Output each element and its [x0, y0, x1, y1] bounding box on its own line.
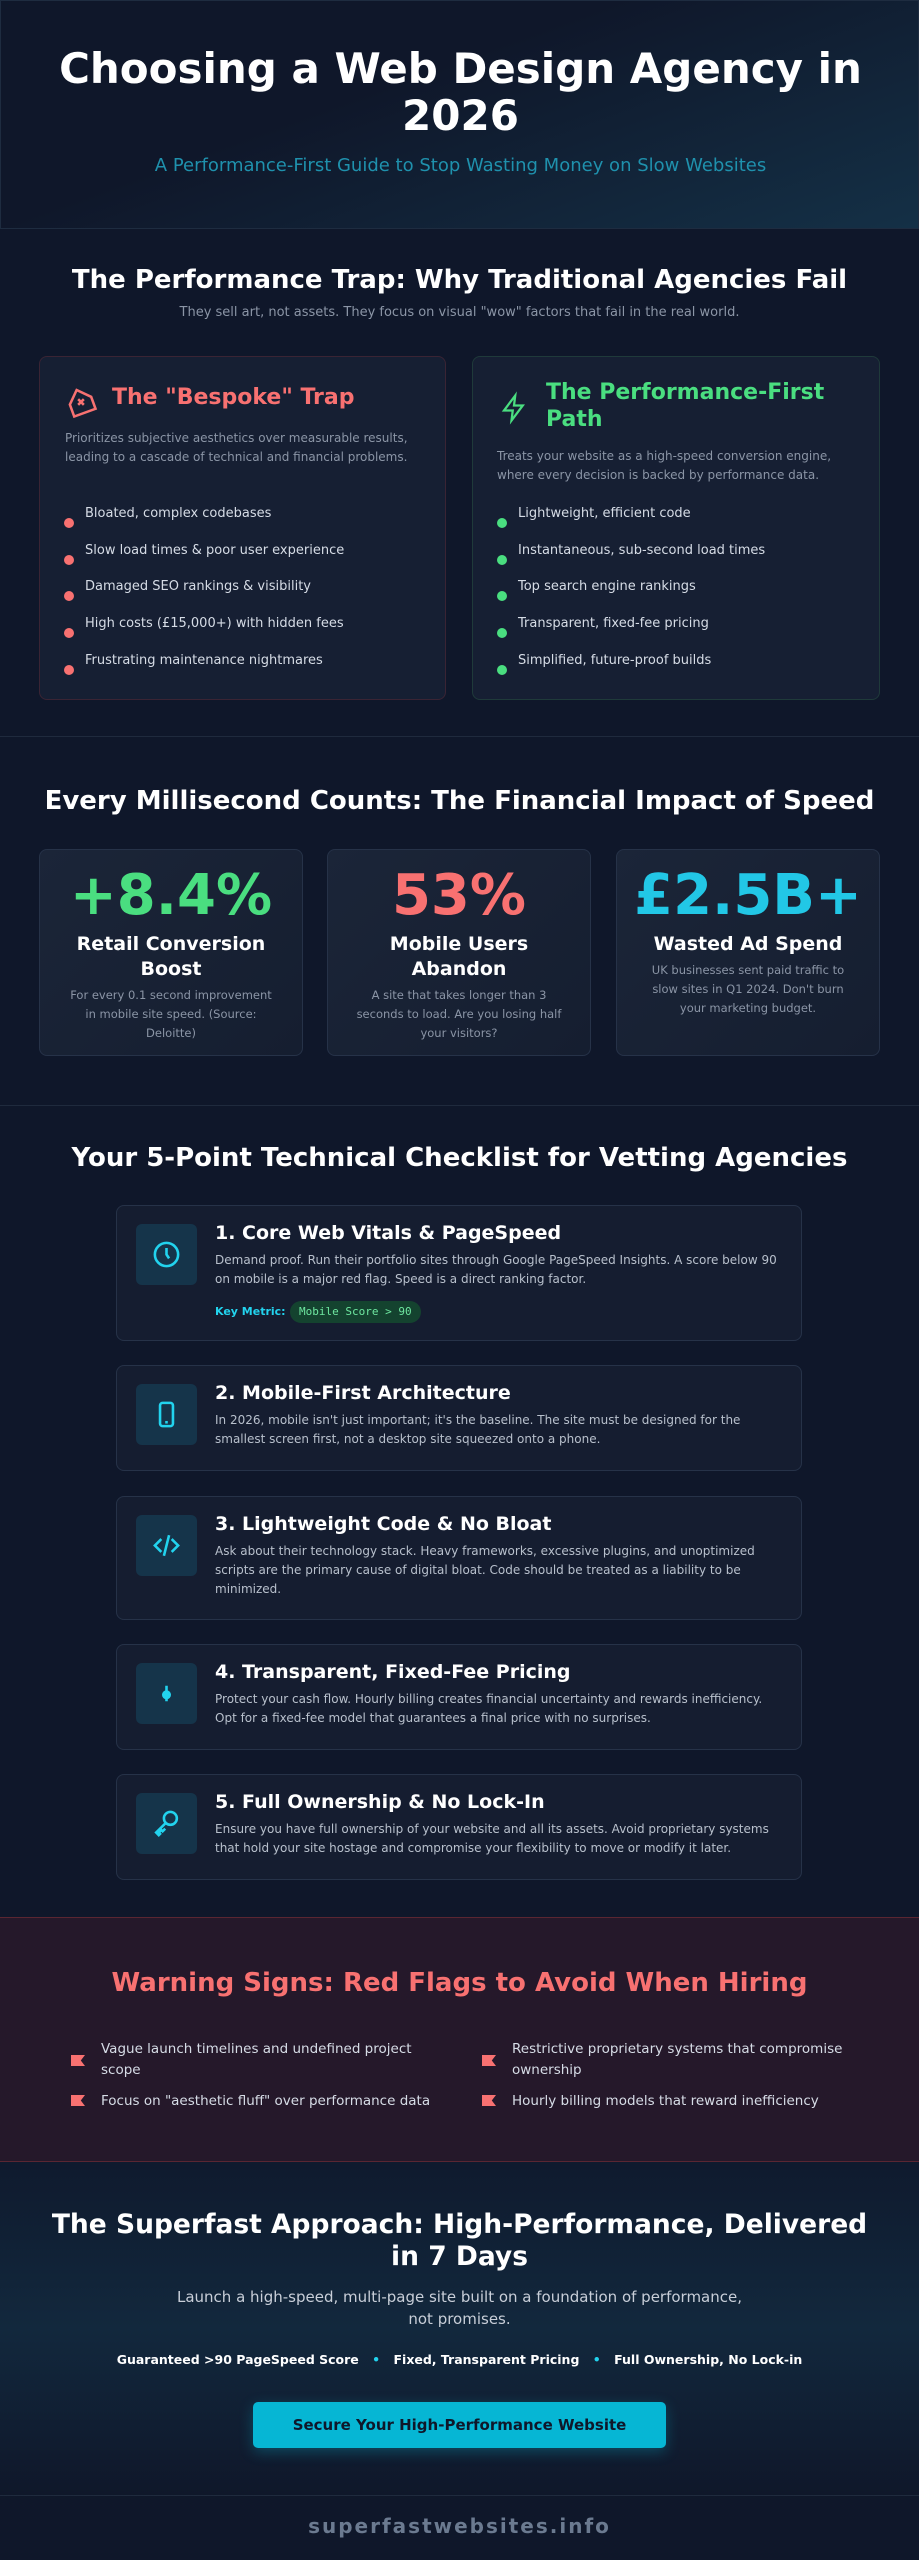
description — [177, 2288, 742, 2328]
list: Frustrating maintenance nightmares — [85, 653, 323, 668]
checklist item 3 — [116, 1496, 802, 1620]
checklist item 5: 5. Full Ownership & No Lock-In — [215, 1791, 545, 1813]
heading — [546, 380, 824, 432]
icon: phone — [136, 1384, 197, 1445]
flag items — [71, 2041, 842, 2109]
flag items: Focus on "aesthetic fluff" over performance data — [101, 2093, 430, 2109]
section: performance trap — [0, 229, 919, 737]
checklist item 4: 4. Transparent, Fixed-Fee Pricing — [215, 1661, 570, 1683]
heading: checklist: Your 5-Point Technical Checklist for Vetting Agencies — [72, 1143, 847, 1173]
description: Prioritizes subjective aesthetics over measurable results, leading to a cascade of technical and financial problems. — [65, 431, 408, 464]
cta button: Secure Your High-Performance Website — [293, 2416, 626, 2434]
list: Lightweight, efficient code — [518, 506, 691, 521]
description: Treats your website as a high-speed conversion engine, where every decision is backed by performance data. — [497, 449, 831, 482]
heading: The "Bespoke" Trap — [112, 385, 354, 410]
panel: bespoke trap — [39, 356, 446, 700]
features: Guaranteed >90 PageSpeed Score • Fixed, Transparent Pricing • Full Ownership, No Lock-in — [117, 2352, 802, 2367]
checklist item 2: 2. Mobile-First Architecture — [215, 1382, 511, 1404]
checklist item 5 — [116, 1774, 802, 1880]
header — [0, 0, 919, 229]
stat: mobile abandon: 53% — [392, 863, 526, 928]
icon: coin — [136, 1663, 197, 1724]
heading — [52, 2209, 867, 2272]
checklist item 1: 1. Core Web Vitals & PageSpeed — [215, 1222, 561, 1244]
footer: superfastwebsites.info — [308, 2514, 611, 2538]
title: Choosing a Web Design Agency in — [59, 44, 862, 93]
icon: code — [136, 1515, 197, 1576]
list: Instantaneous, sub-second load times — [518, 543, 765, 558]
subtitle: A Performance-First Guide to Stop Wasting Money on Slow Websites — [155, 155, 766, 176]
flag items: Restrictive proprietary systems that compromise ownership — [512, 2041, 842, 2078]
icon: clock — [136, 1224, 197, 1285]
list: Top search engine rankings — [518, 579, 696, 594]
title: 2026 — [402, 91, 519, 140]
list: Slow load times & poor user experience — [85, 543, 344, 558]
list — [497, 506, 765, 675]
stat: conversion: +8.4% — [70, 863, 272, 928]
flag items: Hourly billing models that reward inefficiency — [512, 2093, 819, 2109]
heading: Warning Signs: Red Flags to Avoid When Hiring — [112, 1968, 807, 1998]
icon: lightning — [502, 392, 525, 424]
stat: ad spend: Wasted Ad Spend — [654, 933, 842, 955]
stat: mobile abandon: Abandon — [412, 958, 506, 980]
heading: The Performance Trap: Why Traditional Agencies Fail — [72, 265, 847, 295]
key metric: Mobile Score > 90 — [299, 1305, 412, 1318]
icon: key — [136, 1793, 197, 1854]
flag items: Vague launch timelines and undefined project scope — [101, 2041, 412, 2078]
checklist item 4 — [116, 1644, 802, 1750]
heading: The Performance-First — [546, 380, 824, 405]
panel: performance-first path — [472, 356, 880, 700]
stat: ad spend — [616, 849, 880, 1056]
stat: ad spend: £2.5B+ — [634, 863, 862, 928]
heading: Path — [546, 407, 603, 432]
stat: conversion: Boost — [140, 958, 201, 980]
stat: mobile abandon: Mobile Users — [390, 933, 528, 955]
list: Bloated, complex codebases — [85, 506, 271, 521]
list: Transparent, fixed-fee pricing — [518, 616, 709, 631]
list: Simplified, future-proof builds — [518, 653, 711, 668]
checklist item 2 — [116, 1365, 802, 1471]
key metric — [215, 1301, 421, 1323]
list: Damaged SEO rankings & visibility — [85, 579, 311, 594]
checklist item 5: Ensure you have full ownership of your website and all its assets. Avoid proprietary systems that hold your site hostage and compromise your flexibility to move or modify it later. — [215, 1822, 769, 1855]
icon: tag x — [68, 388, 98, 418]
stat: conversion — [39, 849, 303, 1056]
heading: in 7 Days — [391, 2241, 528, 2272]
stat: ad spend: UK businesses sent paid traffic to slow sites in Q1 2024. Don't burn your marketing budget. — [652, 963, 844, 1015]
stat: mobile abandon — [327, 849, 591, 1056]
description: Launch a high-speed, multi-page site built on a foundation of performance, — [177, 2288, 742, 2306]
title — [59, 44, 862, 140]
key metric: Key Metric: — [215, 1305, 286, 1318]
checklist item 3: Ask about their technology stack. Heavy frameworks, excessive plugins, and unoptimized scripts are the primary cause of digital bloat. Code should be treated as a liability to be minimized. — [215, 1544, 755, 1596]
description: not promises. — [408, 2310, 511, 2328]
list — [64, 506, 344, 675]
stat: conversion: Retail Conversion — [77, 933, 265, 955]
panel: superfast approach — [0, 2162, 919, 2496]
heading: The Superfast Approach: High-Performance, Delivered — [52, 2209, 867, 2240]
cta button — [253, 2402, 666, 2448]
heading: financial impact: Every Millisecond Counts: The Financial Impact of Speed — [45, 786, 874, 816]
checklist item 1: Demand proof. Run their portfolio sites through Google PageSpeed Insights. A score below 90 on mobile is a major red flag. Speed is a direct ranking factor. — [215, 1253, 777, 1286]
subheading: They sell art, not assets. They focus on visual "wow" factors that fail in the real world. — [180, 305, 739, 320]
checklist item 1 — [116, 1205, 802, 1341]
list: High costs (£15,000+) with hidden fees — [85, 616, 344, 631]
checklist item 2: In 2026, mobile isn't just important; it's the baseline. The site must be designed for the smallest screen first, not a desktop site squeezed onto a phone. — [215, 1413, 740, 1446]
stat: conversion: For every 0.1 second improvement in mobile site speed. (Source: Deloitte) — [70, 988, 272, 1040]
stat: mobile abandon: A site that takes longer than 3 seconds to load. Are you losing half your visitors? — [357, 988, 561, 1040]
checklist item 3: 3. Lightweight Code & No Bloat — [215, 1513, 551, 1535]
checklist item 4: Protect your cash flow. Hourly billing creates financial uncertainty and rewards inefficiency. Opt for a fixed-fee model that guarantees a final price with no surprises. — [215, 1692, 762, 1725]
panel: red flags — [0, 1917, 919, 2162]
